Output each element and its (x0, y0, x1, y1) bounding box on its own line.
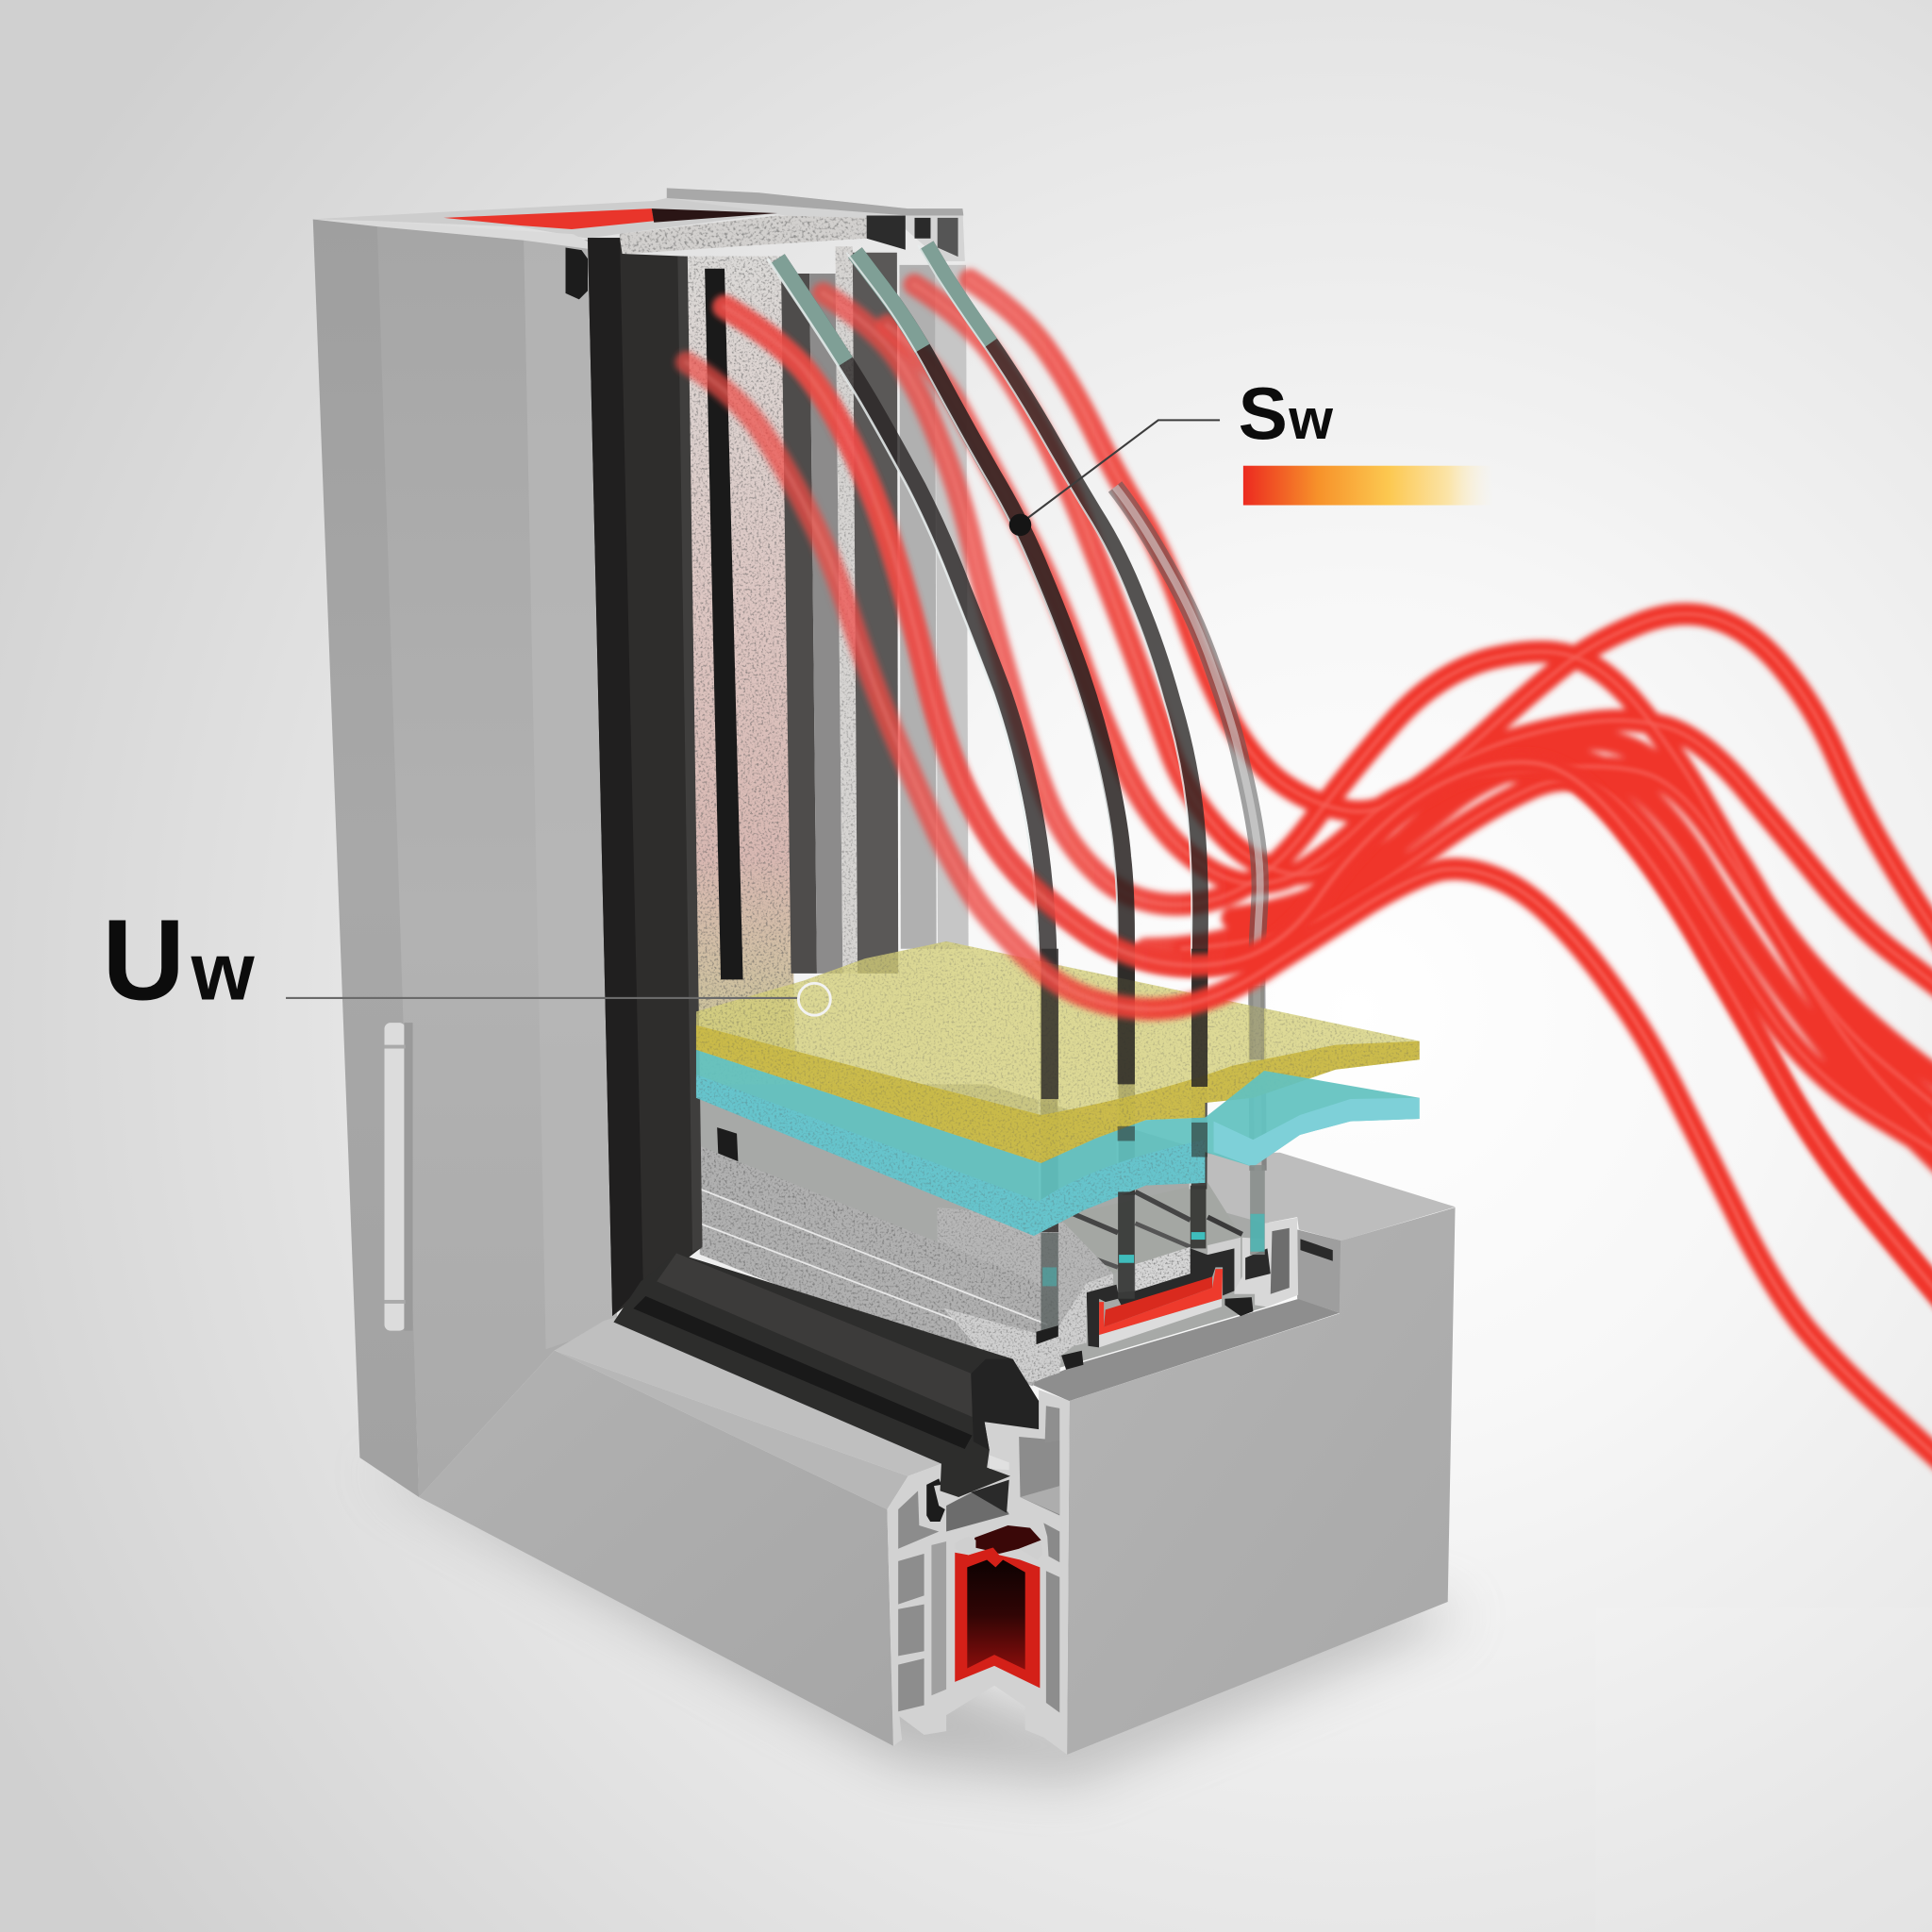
red heat flow strands behind glass (724, 279, 1932, 1304)
Sw label: Sw (1239, 372, 1333, 455)
dark triangle (971, 1480, 1009, 1513)
glazing gasket (1245, 1248, 1271, 1280)
sill and glazing detail (937, 1153, 1456, 1401)
black frame sill (613, 1253, 1039, 1497)
recess surface (1030, 1299, 1340, 1401)
floor back bands (1058, 1182, 1242, 1274)
block ledge top (1208, 1153, 1456, 1241)
pane C bottom (1191, 1186, 1206, 1248)
Uw target ring (798, 983, 830, 1015)
pane C (918, 245, 1200, 1189)
left chambers (898, 1541, 1059, 1713)
glass pane bottoms (1036, 1165, 1265, 1344)
red spacer inner (1104, 1276, 1212, 1327)
right block face (1067, 1208, 1456, 1755)
gasket clip (566, 248, 588, 299)
left gasket (926, 1478, 945, 1522)
steel reinforcement (955, 1525, 1042, 1688)
strand highlights (823, 279, 1932, 1158)
foam column two (836, 246, 858, 974)
rail bevel top (555, 1313, 941, 1476)
pane A base block (1036, 1325, 1058, 1344)
back frame top bracket (667, 188, 965, 261)
mitred bottom rail (419, 1313, 941, 1746)
lower back wall (697, 1084, 1269, 1368)
foam section cut (943, 1274, 1113, 1382)
light column (899, 265, 937, 949)
rail face (419, 1351, 893, 1746)
Uw leader line (286, 997, 798, 999)
front strand bodies (687, 307, 1932, 1466)
red heat flow strands in front (687, 307, 1932, 1466)
upper right floor (1020, 1486, 1059, 1514)
foam step right (1208, 1238, 1241, 1292)
pane B bottom (1118, 1191, 1135, 1299)
red spacer (1099, 1269, 1223, 1335)
dark column two (853, 253, 898, 974)
panel top edge (313, 219, 589, 249)
slot (1300, 1239, 1333, 1261)
outer left side panel (313, 219, 419, 1497)
dark opening (652, 208, 777, 223)
central groove (946, 1492, 1009, 1532)
profile cross-section (887, 1390, 1070, 1755)
light column right (935, 265, 969, 949)
right mid chamber (1043, 1523, 1059, 1562)
upper left chamber (898, 1491, 939, 1549)
black frame column (588, 238, 702, 1316)
bead cavity (1271, 1228, 1290, 1294)
pane A bottom (1041, 1233, 1058, 1330)
white base (1099, 1299, 1222, 1347)
Sw target dot (1009, 514, 1031, 536)
foam speckle (684, 257, 796, 1109)
pane D (1115, 487, 1260, 1171)
dark column (781, 274, 817, 974)
floor foam top (937, 1208, 1113, 1327)
upper right chamber (1019, 1437, 1059, 1516)
pane A (768, 258, 1050, 1232)
glass panes (768, 245, 1260, 1232)
strand bodies (724, 279, 1932, 1304)
teal glints (1042, 1214, 1264, 1286)
Uw label: Uw (102, 895, 256, 1024)
blue coating layer (696, 1050, 1420, 1236)
foam block (1135, 1247, 1191, 1291)
foam top (620, 215, 867, 255)
black spacer strip (705, 269, 743, 979)
pane B (846, 253, 1126, 1195)
top ledge (312, 198, 777, 239)
panel light stripe (524, 238, 617, 1349)
red reinforcement top (443, 208, 654, 229)
rail bevel chamfer (555, 1351, 908, 1509)
window interior (684, 246, 1269, 1368)
profile body (887, 1390, 1070, 1755)
hinge (385, 1023, 413, 1331)
foam floor left (700, 1146, 1059, 1386)
top right chamber (1045, 1406, 1059, 1442)
pane D bottom (1250, 1165, 1265, 1255)
Sw gradient bar (1243, 466, 1493, 506)
small white insert (990, 1456, 1009, 1470)
black strip lower (717, 1127, 740, 1189)
window frame unit (312, 188, 1456, 1755)
Uw callout (102, 895, 830, 1024)
top of frame (312, 188, 965, 261)
recess back wall (1297, 1229, 1341, 1313)
grey column (809, 274, 842, 974)
floor shadow (370, 1466, 1466, 1780)
Sw callout (1009, 372, 1493, 536)
foam strip inner (684, 257, 796, 1109)
Sw leader line (1020, 420, 1220, 524)
yellow coating layer (696, 941, 1420, 1163)
bottom gasket (1224, 1297, 1253, 1316)
front strand highlights (687, 307, 1932, 1466)
glazing bead (1234, 1218, 1298, 1307)
main side panel (377, 222, 617, 1497)
black spacer holder (1087, 1248, 1234, 1347)
glass pane segments over layers (1041, 949, 1264, 1157)
